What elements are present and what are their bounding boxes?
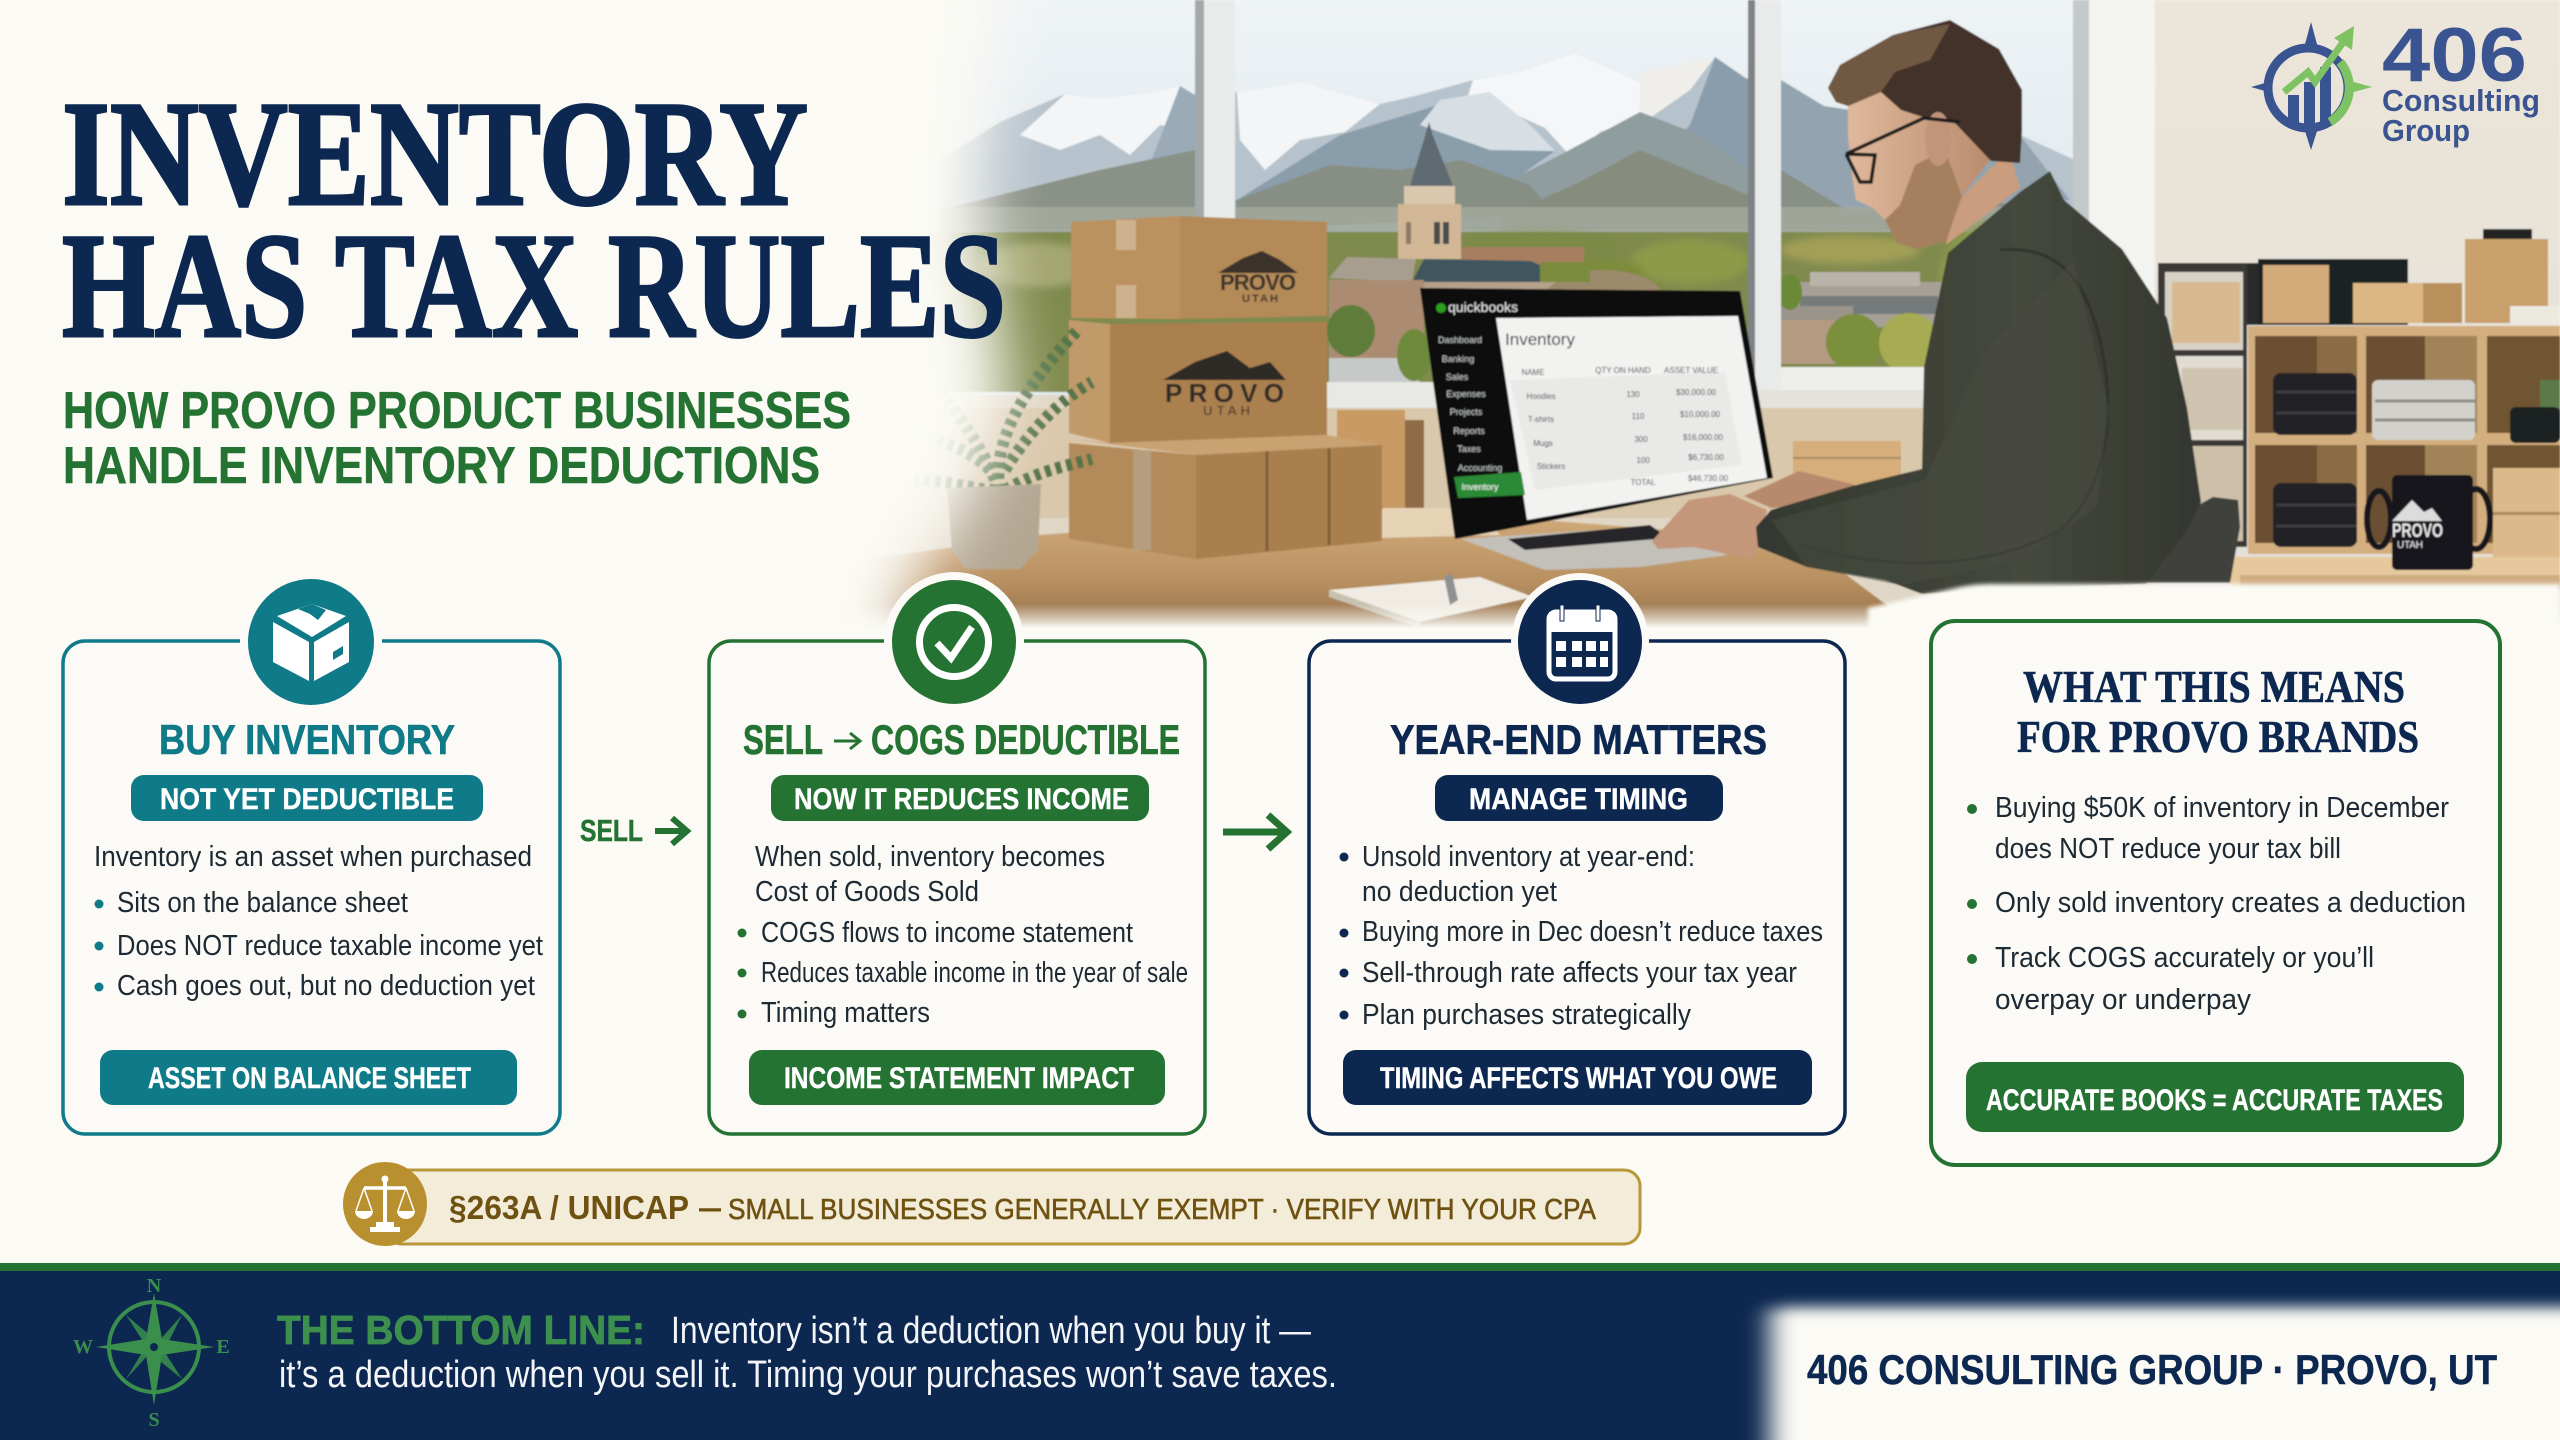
- text block: no deduction yet: [1362, 876, 1557, 908]
- bottom line text: Inventory isn’t a deduction when you buy it —: [671, 1310, 1311, 1352]
- callout text: [449, 1189, 1597, 1226]
- hero photo scene: office with mountain view: PROVO: [1220, 270, 1296, 295]
- desk: [870, 508, 1888, 626]
- takeaway button: [1966, 1062, 2464, 1132]
- status pill: MANAGE TIMING: [1469, 783, 1688, 816]
- potted plant: [908, 331, 1092, 569]
- heading: [743, 716, 1180, 763]
- panel: buy inventory: [63, 579, 560, 1134]
- hero photo scene: office with mountain view: quickbooks: [1448, 299, 1518, 315]
- hero photo scene: office with mountain view: Banking: [1442, 354, 1474, 364]
- hero photo scene: office with mountain view: $46,730.00: [1688, 474, 1729, 483]
- campus tower and hall: [1461, 247, 1584, 267]
- bottom line text: it’s a deduction when you sell it. Timing your purchases won’t save taxes.: [279, 1354, 1337, 1396]
- text block: Track COGS accurately or you’ll: [1995, 942, 2374, 974]
- footer band: [0, 1263, 2560, 1440]
- icon: scales: [343, 1162, 427, 1246]
- takeaway button: ASSET ON BALANCE SHEET: [148, 1062, 471, 1095]
- mug: [2367, 475, 2490, 570]
- text block: does NOT reduce your tax bill: [1995, 833, 2341, 865]
- hero photo scene: office with mountain view: Projects: [1450, 407, 1483, 417]
- subtitle: HOW PROVO PRODUCT BUSINESSES: [63, 382, 851, 440]
- panel: what this means: [1931, 621, 2500, 1165]
- icon: check: [884, 572, 1024, 712]
- icon: compass rose: N: [147, 1275, 162, 1297]
- title: HAS TAX RULES: [62, 203, 1006, 369]
- title: [62, 71, 1006, 369]
- bottom line text: [277, 1307, 1337, 1396]
- heading: YEAR-END MATTERS: [1390, 716, 1767, 763]
- takeaway button: [749, 1050, 1165, 1105]
- black racks and upper boxes: [2158, 263, 2247, 547]
- right pane town: [1795, 282, 1944, 327]
- bottom line text: THE BOTTOM LINE:: [277, 1307, 645, 1353]
- wall right: [2155, 0, 2560, 640]
- takeaway button: TIMING AFFECTS WHAT YOU OWE: [1380, 1062, 1777, 1095]
- text block: Does NOT reduce taxable income yet: [117, 930, 543, 962]
- hero photo scene: office with mountain view: 110: [1632, 412, 1645, 421]
- heading: [2017, 662, 2419, 762]
- takeaway button: INCOME STATEMENT IMPACT: [784, 1062, 1134, 1095]
- hero photo scene: office with mountain view: NAME: [1521, 368, 1545, 377]
- hero photo scene: office with mountain view: Taxes: [1457, 444, 1481, 454]
- callout: section 263A: [343, 1162, 1640, 1246]
- hero photo scene: office with mountain view: $16,000.00: [1683, 433, 1724, 442]
- man: hair: [1828, 20, 2022, 163]
- footer brand panel: [1770, 1307, 2560, 1440]
- chair: [2146, 496, 2241, 584]
- hero photo scene: office with mountain view: UTAH: [1203, 403, 1250, 418]
- text block: [738, 841, 1188, 1029]
- hero photo scene: office with mountain view: PROVO: [1165, 378, 1284, 408]
- hero photo scene: office with mountain view: [864, 0, 2560, 627]
- text block: [1967, 792, 2466, 1016]
- hero photo scene: office with mountain view: Inventory: [1505, 330, 1575, 349]
- man: hands: [1652, 494, 1767, 559]
- logo: 406 Consulting Group: [2251, 13, 2540, 150]
- text block: [1340, 841, 1823, 1031]
- text block: Buying $50K of inventory in December: [1995, 792, 2449, 824]
- hero photo scene: office with mountain view: TOTAL: [1630, 478, 1656, 487]
- arrow: sell: SELL: [580, 813, 643, 848]
- text block: Plan purchases strategically: [1362, 999, 1691, 1031]
- heading: COGS DEDUCTIBLE: [871, 716, 1180, 763]
- wood shelves with folded shirts: [2248, 326, 2560, 554]
- text block: Buying more in Dec doesn’t reduce taxes: [1362, 916, 1823, 948]
- text block: Sits on the balance sheet: [117, 887, 408, 919]
- callout text: §263A / UNICAP: [449, 1189, 689, 1226]
- text block: Reduces taxable income in the year of sale: [761, 957, 1188, 989]
- hero photo scene: office with mountain view: Sales: [1446, 372, 1469, 382]
- title: INVENTORY: [62, 71, 808, 237]
- icon: compass rose: E: [216, 1336, 230, 1358]
- text block: Cash goes out, but no deduction yet: [117, 970, 535, 1002]
- logo: 406 Consulting Group: 406: [2382, 13, 2527, 98]
- status pill: NOW IT REDUCES INCOME: [794, 783, 1129, 816]
- background cardboard boxes: [1337, 410, 1405, 508]
- status pill: [771, 775, 1149, 821]
- man: shirt: [1756, 171, 2201, 594]
- arrow: to year-end: [1223, 815, 1287, 849]
- mug: UTAH: [2397, 540, 2423, 551]
- notebook and pen: [1329, 577, 1533, 622]
- hero photo scene: office with mountain view: Expenses: [1446, 389, 1486, 399]
- callout text: SMALL BUSINESSES GENERALLY EXEMPT · VERIFY WITH YOUR CPA: [728, 1194, 1597, 1226]
- logo: 406 Consulting Group: Group: [2382, 113, 2470, 148]
- hero photo scene: office with mountain view: Dashboard: [1438, 335, 1482, 345]
- hero photo scene: office with mountain view: 100: [1636, 456, 1650, 465]
- hero photo scene: office with mountain view: Stickers: [1537, 462, 1565, 471]
- status pill: [131, 775, 483, 821]
- hero photo scene: office with mountain view: T-shirts: [1528, 415, 1554, 424]
- heading: SELL: [743, 716, 823, 763]
- hero photo scene: office with mountain view: 130: [1626, 390, 1640, 399]
- subtitle: HANDLE INVENTORY DEDUCTIONS: [63, 437, 820, 495]
- text block: COGS flows to income statement: [761, 917, 1133, 949]
- hero photo scene: office with mountain view: Mugs: [1533, 439, 1553, 448]
- text block: Timing matters: [761, 997, 930, 1029]
- text block: When sold, inventory becomes: [755, 841, 1105, 873]
- hero photo scene: office with mountain view: $10,000.00: [1680, 410, 1721, 419]
- takeaway button: ACCURATE BOOKS = ACCURATE TAXES: [1986, 1084, 2443, 1117]
- subtitle: [63, 382, 851, 495]
- hero photo scene: office with mountain view: Inventory: [1461, 482, 1499, 492]
- callout text: —: [699, 1189, 721, 1226]
- hero photo scene: office with mountain view: $30,000.00: [1676, 388, 1717, 397]
- window frames and sill: [1203, 0, 1236, 220]
- panel: sell cogs deductible: [709, 572, 1205, 1134]
- text block: Inventory is an asset when purchased: [94, 841, 532, 873]
- icon: box: [240, 579, 382, 705]
- hero photo scene: office with mountain view: 300: [1634, 435, 1648, 444]
- text block: Unsold inventory at year-end:: [1362, 841, 1695, 873]
- heading: BUY INVENTORY: [159, 716, 455, 763]
- hero photo scene: office with mountain view: UTAH: [1242, 293, 1278, 305]
- takeaway button: [100, 1050, 517, 1105]
- logo: 406 Consulting Group: Consulting: [2382, 83, 2540, 118]
- icon: compass rose: [73, 1275, 230, 1431]
- mug: PROVO: [2392, 521, 2443, 542]
- text block: Sell-through rate affects your tax year: [1362, 957, 1797, 989]
- man: glasses: [1846, 118, 1960, 182]
- panel: year-end matters: [1309, 573, 1845, 1134]
- hero photo scene: office with mountain view: Accounting: [1458, 463, 1502, 473]
- hero photo scene: office with mountain view: Reports: [1453, 426, 1485, 436]
- heading: WHAT THIS MEANS: [2023, 662, 2405, 712]
- status pill: [1435, 775, 1723, 821]
- icon: compass rose: S: [148, 1409, 160, 1431]
- hero photo scene: office with mountain view: Hoodies: [1526, 392, 1556, 401]
- text block: overpay or underpay: [1995, 984, 2251, 1016]
- text block: Cost of Goods Sold: [755, 876, 979, 908]
- heading: FOR PROVO BRANDS: [2017, 712, 2419, 762]
- hero photo scene: office with mountain view: ASSET VALUE: [1664, 366, 1718, 375]
- icon: calendar: [1511, 573, 1649, 711]
- takeaway button: [1343, 1050, 1812, 1105]
- hero photo scene: office with mountain view: $6,730.00: [1688, 453, 1724, 462]
- icon: compass rose: W: [73, 1336, 93, 1358]
- stacked cardboard boxes: [1071, 216, 1180, 319]
- text block: Only sold inventory creates a deduction: [1995, 887, 2466, 919]
- hero photo scene: office with mountain view: QTY ON HAND: [1595, 366, 1651, 375]
- text block: [94, 841, 543, 1002]
- status pill: NOT YET DEDUCTIBLE: [160, 783, 454, 816]
- laptop: [1461, 527, 1728, 570]
- man: neck and face: [1946, 150, 2020, 245]
- cream panel behind right card: [1868, 584, 2560, 660]
